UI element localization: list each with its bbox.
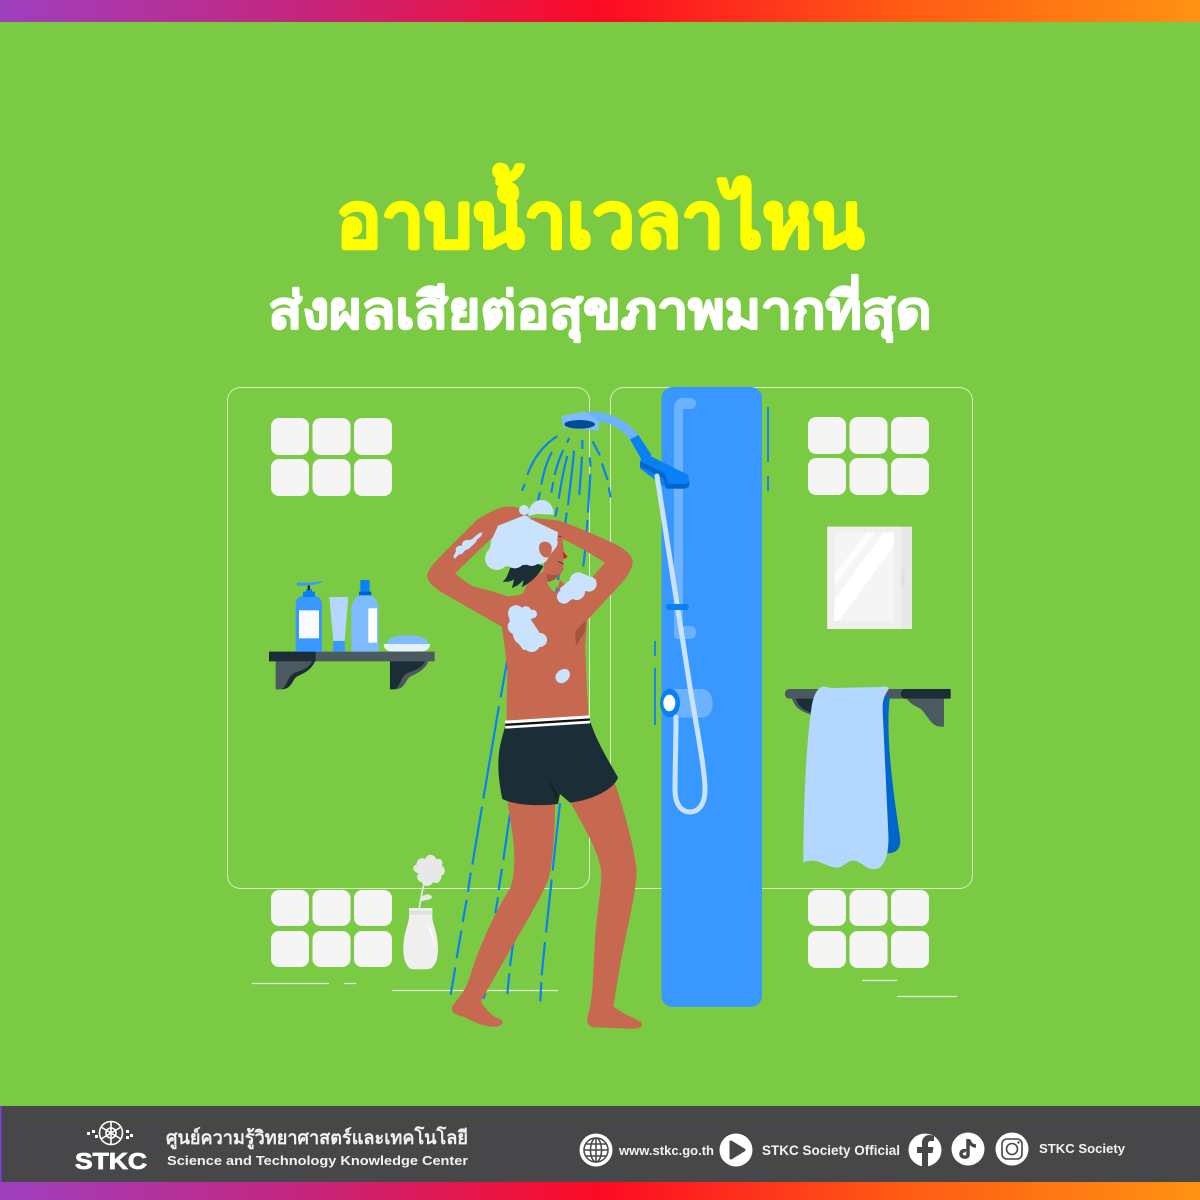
panel: right wall — [610, 388, 972, 888]
person: legs and shorts — [452, 715, 642, 1029]
title: อาบน้ำเวลาไหน — [336, 164, 864, 264]
towel back — [882, 697, 900, 853]
floor lines — [252, 980, 957, 996]
bottom gradient bar — [0, 1182, 1200, 1200]
tiles: left top — [271, 418, 392, 496]
foam on right shoulder — [557, 572, 597, 604]
rail — [785, 689, 951, 699]
shower valve — [660, 689, 713, 718]
shorts — [498, 723, 618, 805]
foam on back — [508, 605, 547, 652]
mirror cabinet — [827, 527, 912, 629]
website: www.stkc.go.th — [618, 1143, 714, 1158]
foam on top of hand — [519, 500, 554, 516]
icon: play — [720, 1134, 752, 1166]
water lines right of column — [655, 407, 768, 725]
tiles: left bottom — [271, 890, 392, 967]
logo: STKC: STKC — [75, 1148, 147, 1174]
title: ส่งผลเสียต่อสุขภาพมากที่สุด — [268, 275, 932, 343]
left leg — [452, 800, 555, 1027]
shelf with bottles and soap — [269, 580, 435, 689]
right leg — [570, 783, 642, 1029]
tiles: right top — [808, 417, 929, 495]
ear — [539, 542, 552, 558]
logo: STKC — [75, 1122, 147, 1174]
tube — [329, 597, 348, 641]
footer bar — [0, 1106, 1200, 1200]
footer center name: ศูนย์ความรู้วิทยาศาสตร์และเทคโนโลยี — [166, 1126, 468, 1150]
soap dish — [387, 635, 428, 644]
water streams behind person — [501, 436, 611, 697]
shower hose — [657, 476, 705, 812]
tall bottle — [351, 595, 379, 652]
top gradient bar — [0, 0, 1200, 22]
vase with flower — [403, 855, 445, 969]
icon: globe — [580, 1134, 612, 1166]
foam on head — [485, 515, 558, 570]
water streams lower — [451, 706, 560, 1001]
bracket left — [276, 661, 315, 689]
icon: tiktok — [952, 1132, 984, 1166]
right bracket — [907, 698, 944, 727]
shower column — [662, 387, 762, 1007]
armpit shade — [575, 621, 586, 646]
waistband — [505, 715, 590, 729]
hose clip — [666, 604, 689, 610]
foam spot — [555, 669, 570, 683]
shower head — [561, 411, 689, 489]
shelf board — [269, 652, 435, 661]
neck and face — [523, 535, 567, 596]
footer center name: Science and Technology Knowledge Center — [167, 1153, 468, 1168]
youtube name: STKC Society Official — [762, 1142, 900, 1158]
towel front — [803, 687, 889, 869]
torso and arms — [427, 506, 633, 721]
tiles: right bottom — [808, 890, 929, 968]
person: upper body — [427, 500, 633, 721]
hair — [503, 560, 543, 588]
panel: left wall — [228, 388, 590, 888]
pump bottle — [296, 595, 322, 652]
icon: instagram — [996, 1132, 1028, 1166]
title — [268, 164, 932, 343]
towel rail and towel — [785, 687, 951, 869]
footer center name — [166, 1126, 468, 1168]
icon: facebook — [908, 1134, 942, 1167]
left bracket — [792, 698, 815, 717]
bracket right — [390, 661, 428, 689]
instagram name: STKC Society — [1039, 1141, 1126, 1156]
foam on left arm — [453, 532, 482, 559]
forearms over foam — [477, 507, 617, 563]
